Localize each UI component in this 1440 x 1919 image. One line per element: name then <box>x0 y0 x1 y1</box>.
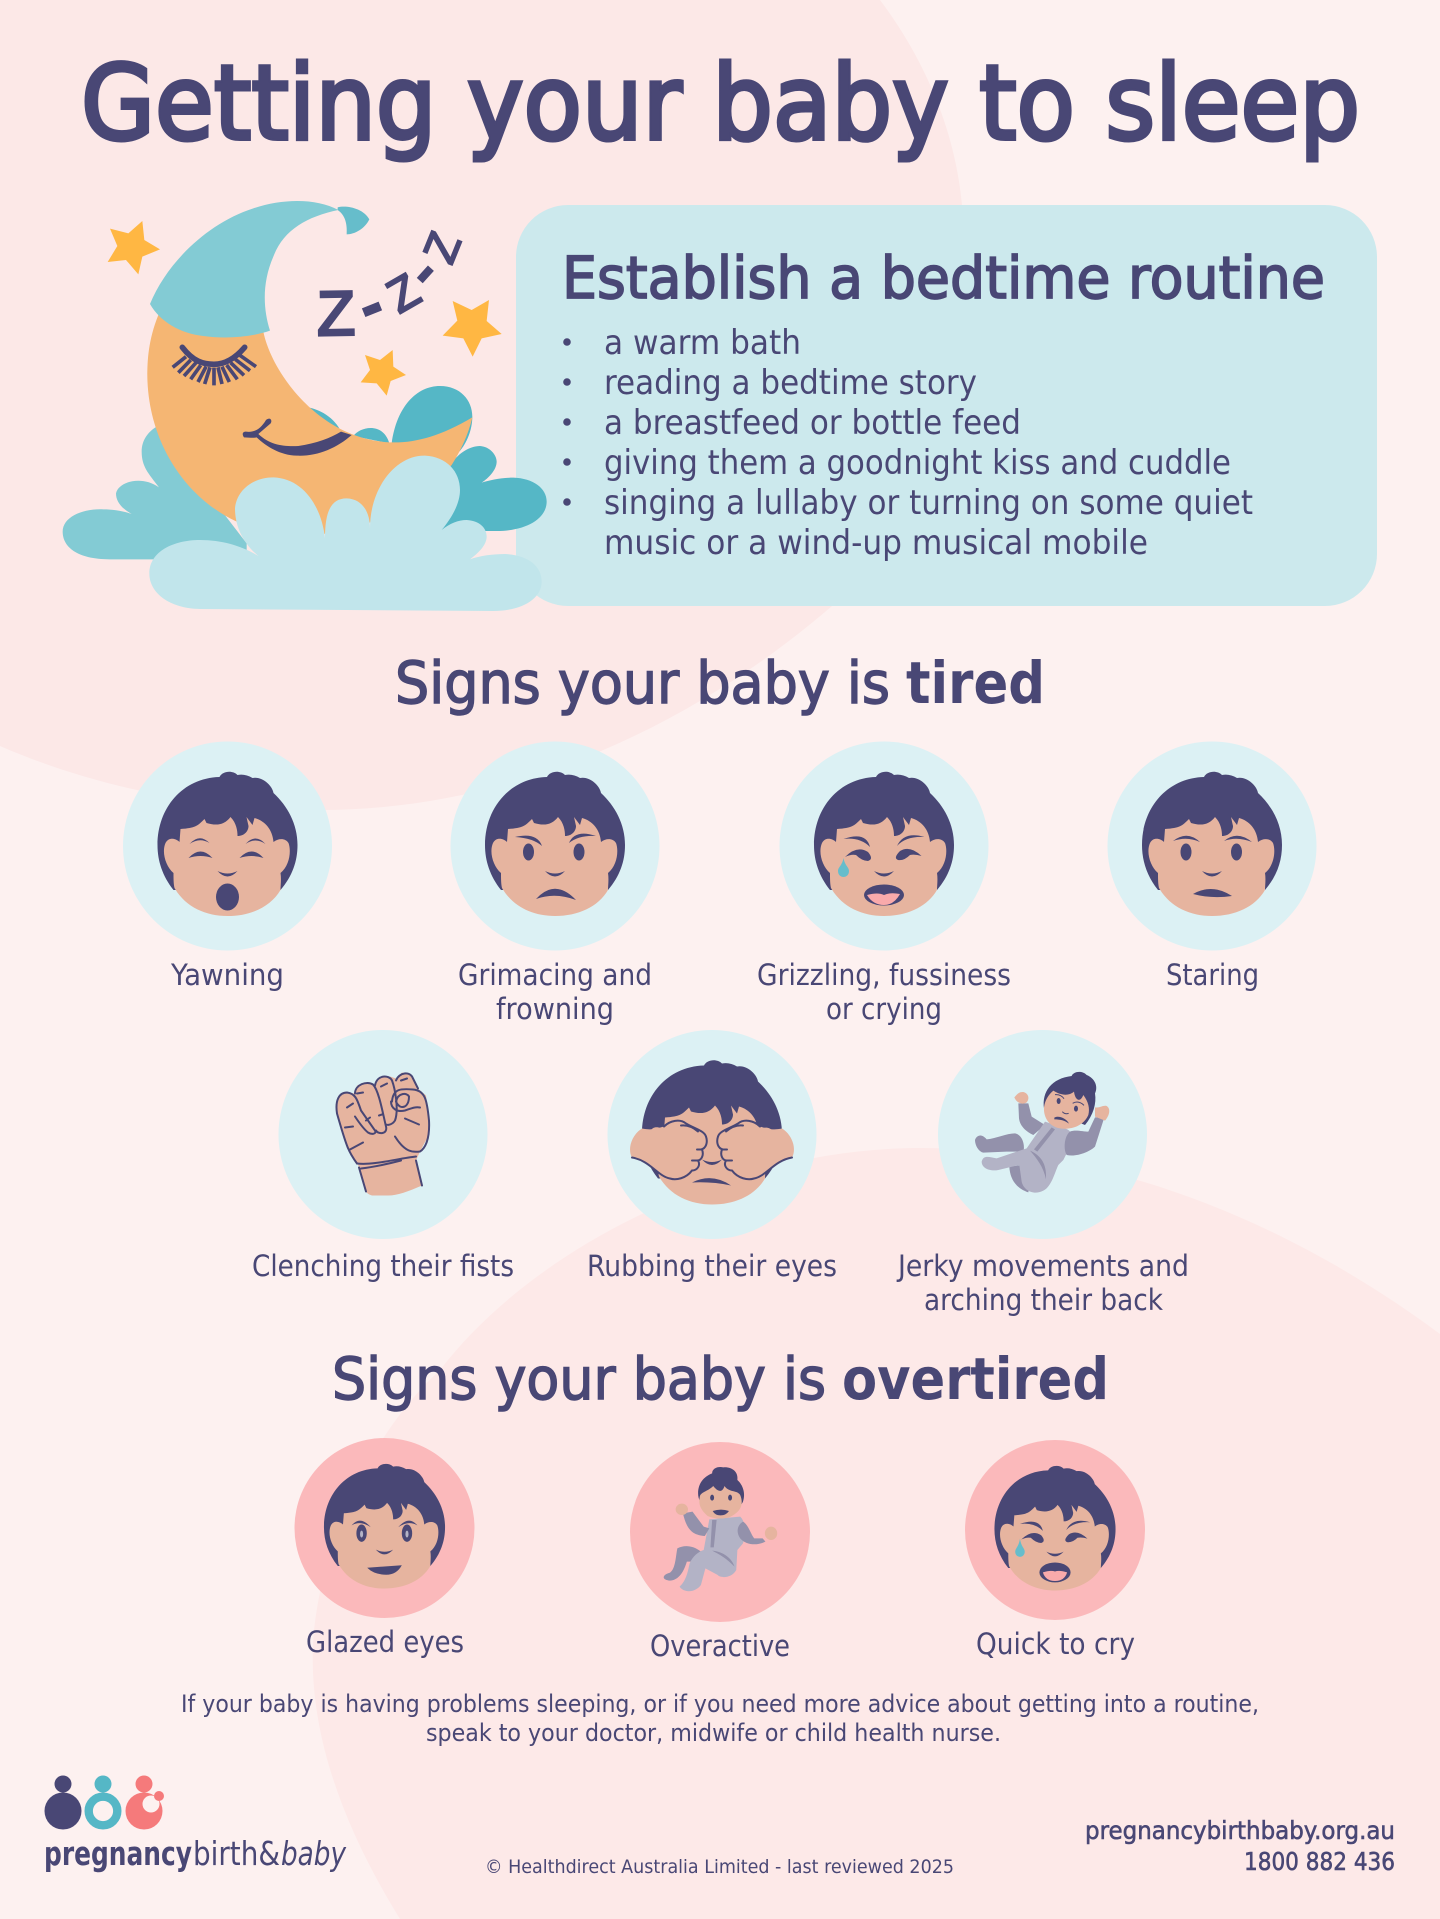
heading: signs your baby is overtired: overtired <box>842 1345 1109 1413</box>
sign: staring: Staring <box>1166 958 1259 992</box>
contact details: 1800 882 436 <box>1244 1847 1395 1876</box>
sign: glazed eyes <box>294 1438 474 1659</box>
front cloud <box>149 456 542 611</box>
bullet list: giving them a goodnight kiss and cuddle <box>604 443 1231 483</box>
sign: yawning: Yawning <box>170 958 284 992</box>
panel heading: Establish a bedtime routine <box>562 244 1325 312</box>
sign: grimacing and frowning: Grimacing and <box>458 958 652 992</box>
panel background <box>516 205 1377 606</box>
title: Getting your baby to sleep <box>81 44 1360 164</box>
sign: grimacing and frowning: frowning <box>496 992 614 1026</box>
heading: signs your baby is tired: Signs your baby is <box>395 649 890 717</box>
sleeping letters: Z <box>412 224 473 271</box>
sign: staring <box>1108 742 1316 992</box>
logo wordmark <box>44 1834 346 1873</box>
nightcap <box>150 201 338 337</box>
sign: rubbing their eyes: Rubbing their eyes <box>587 1249 837 1283</box>
logo wordmark: birth& <box>193 1834 280 1873</box>
back left cloud <box>63 427 247 559</box>
sign: overactive: Overactive <box>650 1629 790 1663</box>
copyright: © Healthdirect Australia Limited - last reviewed 2025 <box>485 1856 954 1878</box>
sign: quick to cry: Quick to cry <box>976 1627 1135 1661</box>
logo <box>44 1776 346 1873</box>
sign: yawning <box>123 742 332 992</box>
sleeping letters <box>315 224 473 352</box>
bullet list: reading a bedtime story <box>604 363 977 403</box>
moon <box>147 315 472 547</box>
panel: establish a bedtime routine <box>516 205 1377 606</box>
sign: overactive <box>630 1442 810 1663</box>
advice paragraph: speak to your doctor, midwife or child health nurse. <box>426 1719 1001 1747</box>
stars <box>108 221 502 396</box>
sign: jerky movements and arching their back: Jerky movements and <box>896 1249 1189 1283</box>
bullet list: singing a lullaby or turning on some quiet <box>604 483 1253 523</box>
advice paragraph <box>181 1690 1259 1747</box>
heading: signs your baby is tired: tired <box>906 649 1045 717</box>
illustration: sleeping moon on clouds <box>63 201 547 611</box>
logo wordmark: pregnancy <box>44 1834 192 1873</box>
sign: jerky movements and arching their back: arching their back <box>924 1283 1163 1317</box>
bullet list: a breastfeed or bottle feed <box>604 403 1021 443</box>
sign: quick to cry <box>965 1440 1145 1661</box>
logo wordmark: baby <box>281 1834 346 1873</box>
cloud bumps behind moon <box>303 386 472 452</box>
nightcap tip <box>338 207 369 234</box>
bullet list: music or a wind-up musical mobile <box>604 523 1148 563</box>
sign: grizzling, fussiness or crying: or crying <box>826 992 942 1026</box>
sign: rubbing their eyes <box>587 1030 837 1283</box>
back right cloud <box>440 446 547 531</box>
sign: glazed eyes: Glazed eyes <box>306 1625 464 1659</box>
bullet list: a warm bath <box>604 323 801 363</box>
closed eye with lashes <box>173 347 256 385</box>
bullet list <box>563 323 1253 563</box>
heading: signs your baby is overtired <box>332 1345 1109 1413</box>
smile <box>243 419 352 456</box>
sign: grizzling, fussiness or crying: Grizzling, fussiness <box>757 958 1011 992</box>
sign: jerky movements and arching their back <box>896 1030 1189 1317</box>
heading: signs your baby is overtired: Signs your baby is <box>332 1345 826 1413</box>
contact details <box>1085 1816 1395 1876</box>
sign: grimacing and frowning <box>450 742 660 1026</box>
sleeping letters: Z <box>315 277 357 352</box>
sign: clenching their fists <box>252 1030 514 1283</box>
logo icon: figures <box>44 1776 164 1830</box>
sleeping letters: Z <box>376 261 431 325</box>
contact details: pregnancybirthbaby.org.au <box>1085 1816 1395 1845</box>
sign: grizzling, fussiness or crying <box>757 742 1011 1026</box>
sign: clenching their fists: Clenching their fists <box>252 1249 514 1283</box>
advice paragraph: If your baby is having problems sleeping, or if you need more advice about getting into a routine, <box>181 1690 1259 1718</box>
